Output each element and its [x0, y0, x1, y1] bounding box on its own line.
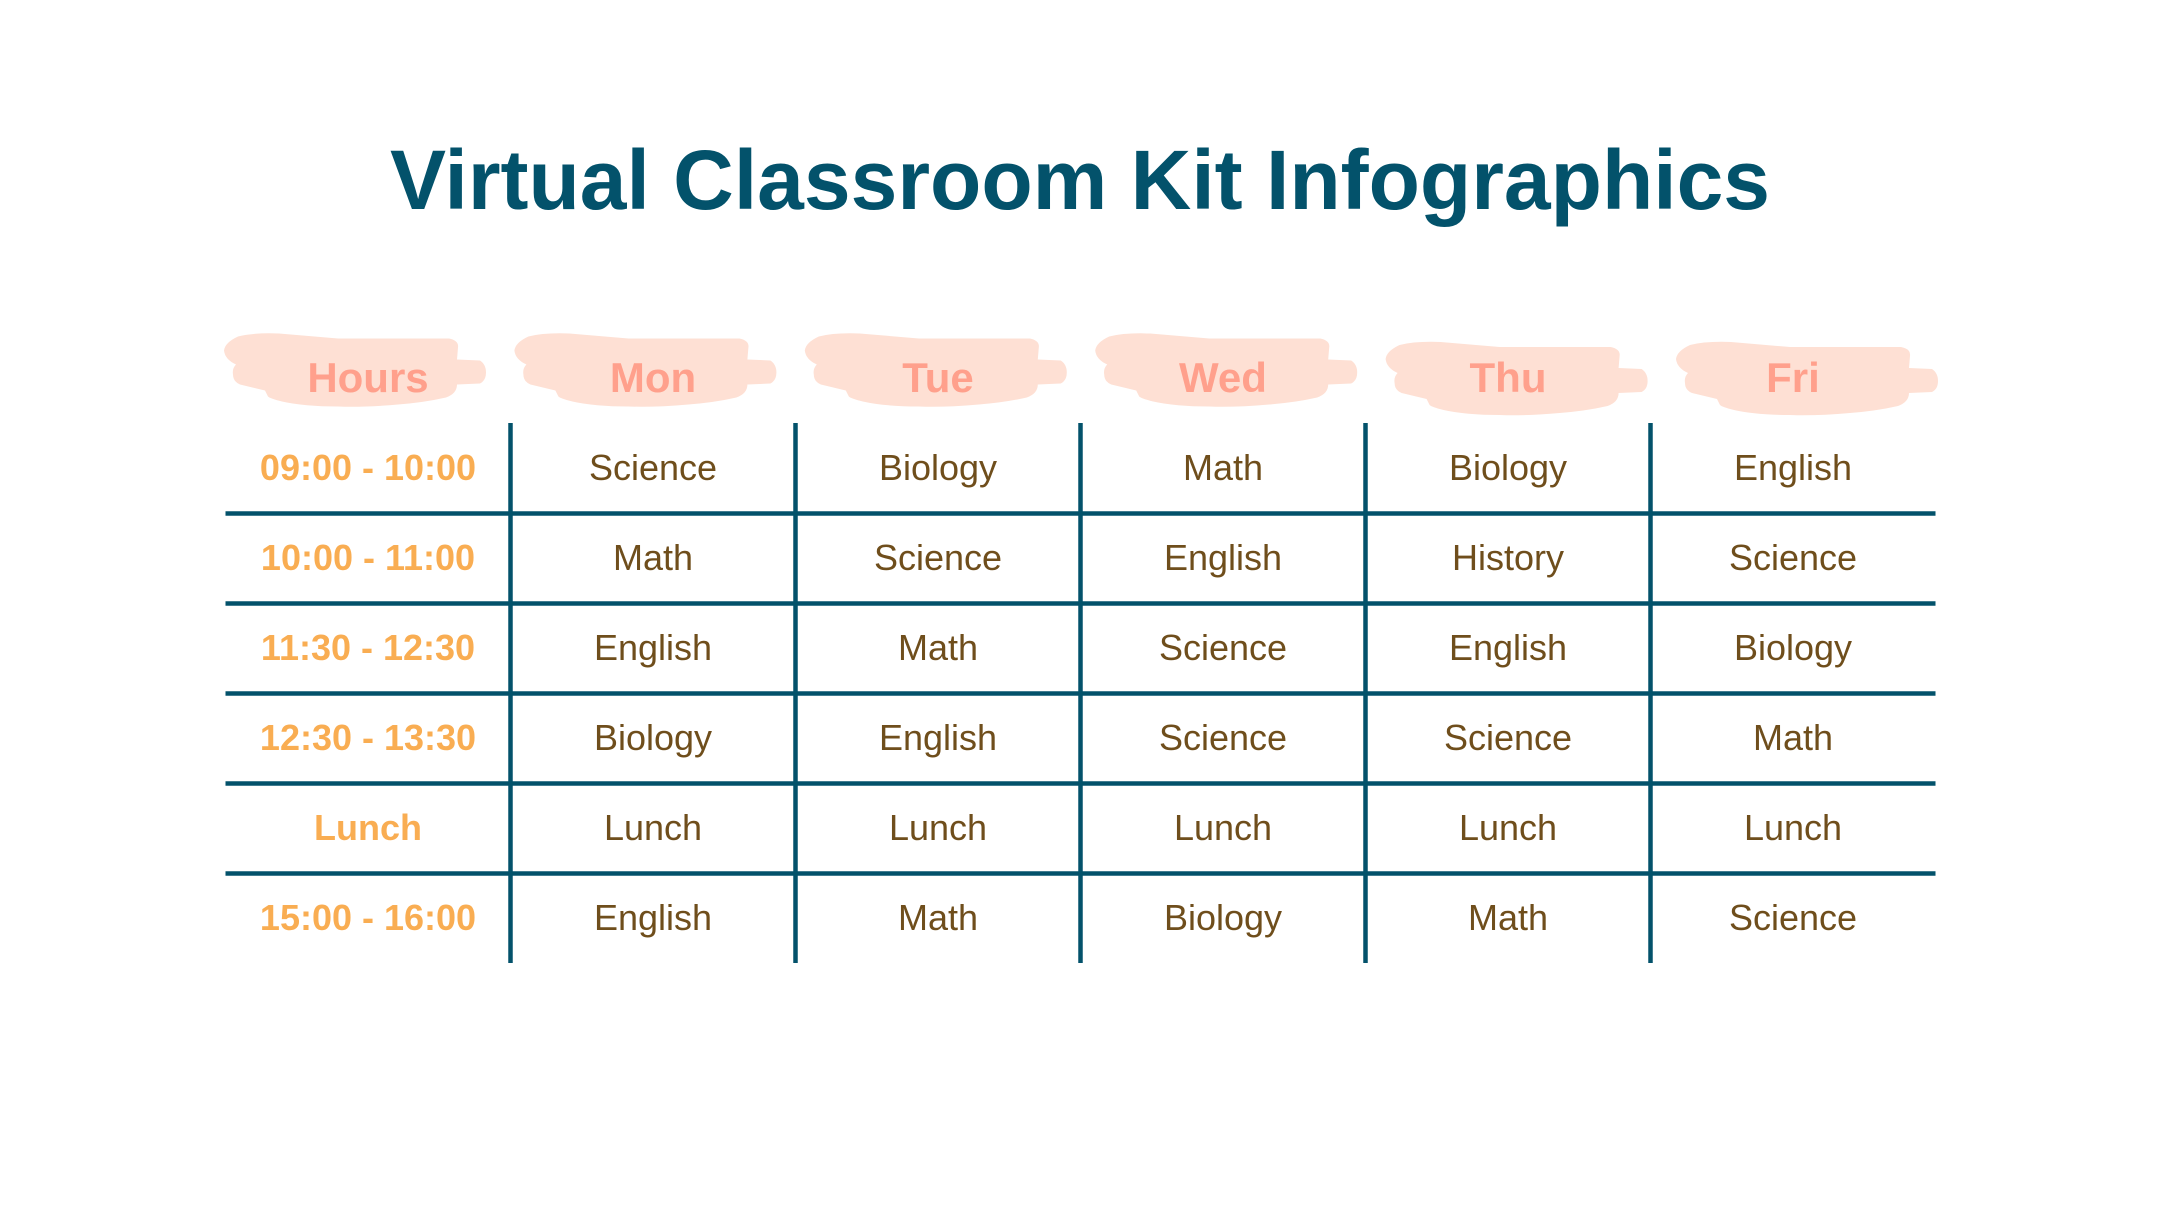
row: 11:30 - 12:30: English [594, 627, 712, 668]
row: 12:30 - 13:30: 12:30 - 13:30 [260, 717, 476, 758]
row: 10:00 - 11:00: Math [613, 537, 693, 578]
header: Wed [1095, 333, 1357, 407]
header: Mon [514, 333, 776, 407]
table grid lines [226, 423, 1936, 963]
row: 09:00 - 10:00: 09:00 - 10:00 [260, 447, 476, 488]
row: 09:00 - 10:00: Science [589, 447, 717, 488]
row: 09:00 - 10:00: Biology [879, 447, 997, 488]
row: 09:00 - 10:00: Biology [1449, 447, 1567, 488]
header: Thu: Thu [1470, 354, 1546, 401]
row: 15:00 - 16:00: English [594, 897, 712, 938]
header: Tue [805, 333, 1067, 407]
header: Fri [1676, 342, 1938, 415]
row: 12:30 - 13:30: Science [1159, 717, 1287, 758]
table header row [224, 333, 1938, 415]
row: Lunch: Lunch [889, 807, 987, 848]
row: 10:00 - 11:00: 10:00 - 11:00 [261, 537, 475, 578]
row: 09:00 - 10:00 [260, 447, 1852, 488]
row: 11:30 - 12:30: Science [1159, 627, 1287, 668]
header: Hours [224, 333, 486, 407]
row: 15:00 - 16:00: Science [1729, 897, 1857, 938]
row: 15:00 - 16:00 [260, 897, 1857, 938]
row: Lunch: Lunch [1174, 807, 1272, 848]
row: 12:30 - 13:30: English [879, 717, 997, 758]
header: Thu [1386, 342, 1648, 415]
header: Hours: Hours [307, 354, 429, 401]
row: 10:00 - 11:00 [261, 537, 1857, 578]
row: 15:00 - 16:00: 15:00 - 16:00 [260, 897, 476, 938]
row: Lunch [314, 807, 1842, 848]
row: 09:00 - 10:00: Math [1183, 447, 1263, 488]
header: Mon: Mon [610, 354, 696, 401]
title: Virtual Classroom Kit Infographics [390, 133, 1770, 227]
row: 11:30 - 12:30: 11:30 - 12:30 [261, 627, 475, 668]
row: 11:30 - 12:30: English [1449, 627, 1567, 668]
row: 15:00 - 16:00: Math [898, 897, 978, 938]
row: 10:00 - 11:00: English [1164, 537, 1282, 578]
header: Fri: Fri [1766, 354, 1820, 401]
row: 10:00 - 11:00: Science [1729, 537, 1857, 578]
row: Lunch: Lunch [1459, 807, 1557, 848]
row: 12:30 - 13:30: Science [1444, 717, 1572, 758]
row: Lunch: Lunch [604, 807, 702, 848]
row: 10:00 - 11:00: History [1452, 537, 1564, 578]
row: 12:30 - 13:30: Math [1753, 717, 1833, 758]
row: 11:30 - 12:30: Biology [1734, 627, 1852, 668]
header: Tue: Tue [902, 354, 974, 401]
row: 09:00 - 10:00: English [1734, 447, 1852, 488]
row: 15:00 - 16:00: Math [1468, 897, 1548, 938]
row: Lunch: Lunch [314, 807, 422, 848]
header: Wed: Wed [1179, 354, 1267, 401]
row: 15:00 - 16:00: Biology [1164, 897, 1282, 938]
row: 10:00 - 11:00: Science [874, 537, 1002, 578]
row: 12:30 - 13:30 [260, 717, 1833, 758]
row: Lunch: Lunch [1744, 807, 1842, 848]
row: 11:30 - 12:30 [261, 627, 1852, 668]
row: 12:30 - 13:30: Biology [594, 717, 712, 758]
row: 11:30 - 12:30: Math [898, 627, 978, 668]
